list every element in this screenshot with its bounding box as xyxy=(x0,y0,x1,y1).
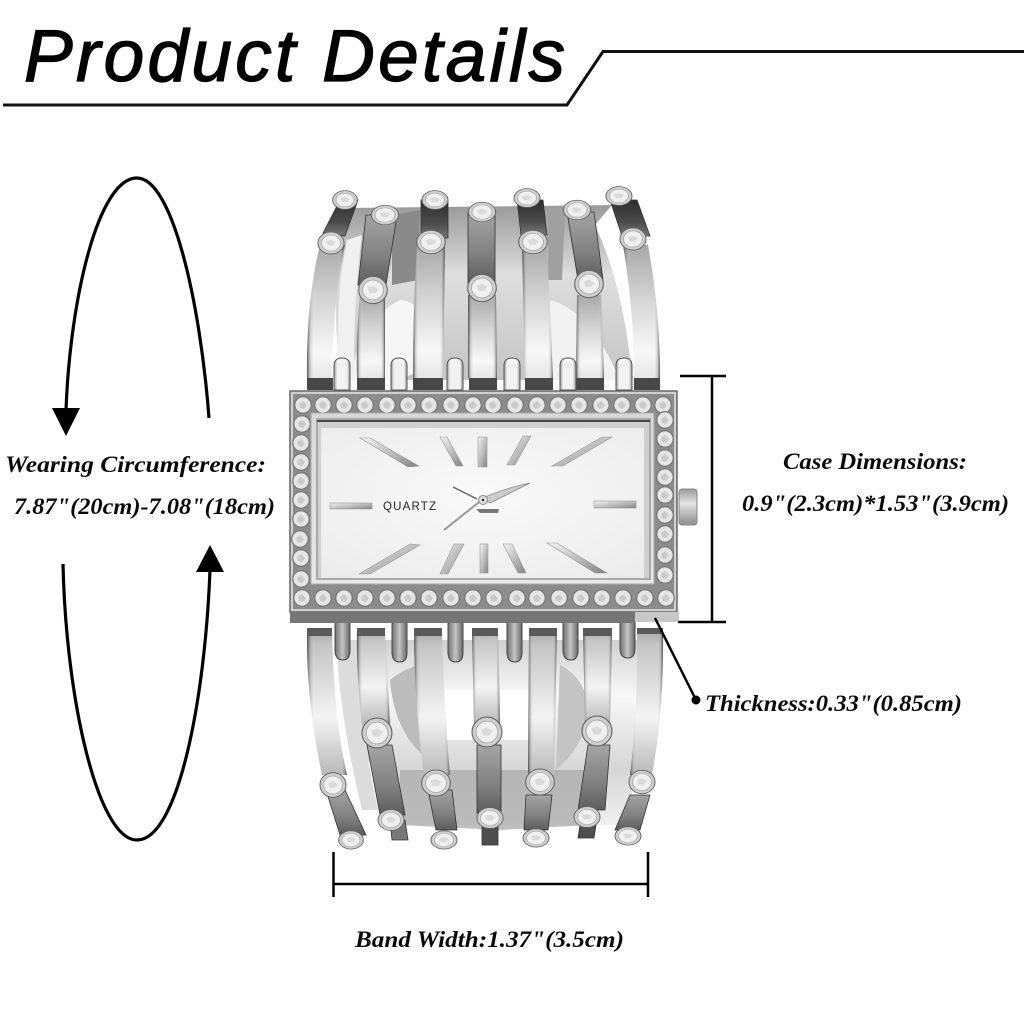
text: case dimensions xyxy=(742,449,1009,517)
hour markers xyxy=(330,436,636,574)
text: wearing circumference: 7.87"(20cm)-7.08"(18cm) xyxy=(14,494,275,520)
dimension: band width bracket xyxy=(333,852,648,897)
text: case dimensions: Case Dimensions: xyxy=(783,449,967,475)
text: thickness: Thickness:0.33"(0.85cm) xyxy=(705,691,962,717)
dial xyxy=(321,428,644,578)
upper band lugs xyxy=(334,358,632,390)
case body xyxy=(290,391,677,612)
inner frame xyxy=(311,413,654,584)
upper band crystals xyxy=(318,187,646,304)
lower band lugs xyxy=(335,622,635,662)
watch: case xyxy=(290,391,679,623)
text: case dimensions: 0.9"(2.3cm)*1.53"(3.9cm) xyxy=(742,491,1009,517)
lower band crystals xyxy=(320,716,655,849)
text: wearing circumference: Wearing Circumference: xyxy=(5,452,266,478)
title rule xyxy=(3,52,1024,105)
crystal bezel xyxy=(291,396,675,607)
title: Product Details xyxy=(24,16,565,97)
dimension: case bracket xyxy=(678,376,726,622)
lower band links xyxy=(307,628,663,845)
watch: lower band xyxy=(307,622,663,849)
upper band links xyxy=(307,200,660,390)
dimension: thickness leader xyxy=(655,618,700,704)
text: wearing circumference xyxy=(5,452,275,520)
brand: QUARTZ xyxy=(383,501,436,513)
hands xyxy=(444,483,530,530)
watch: crown xyxy=(679,489,697,525)
upper band background ring xyxy=(336,205,642,380)
lower band background ring xyxy=(340,640,640,825)
arrow: upper circumference arc xyxy=(52,178,209,436)
arrow: lower circumference arc xyxy=(63,545,224,840)
watch: upper band xyxy=(307,187,660,390)
text: band width: Band Width:1.37"(3.5cm) xyxy=(354,927,624,953)
